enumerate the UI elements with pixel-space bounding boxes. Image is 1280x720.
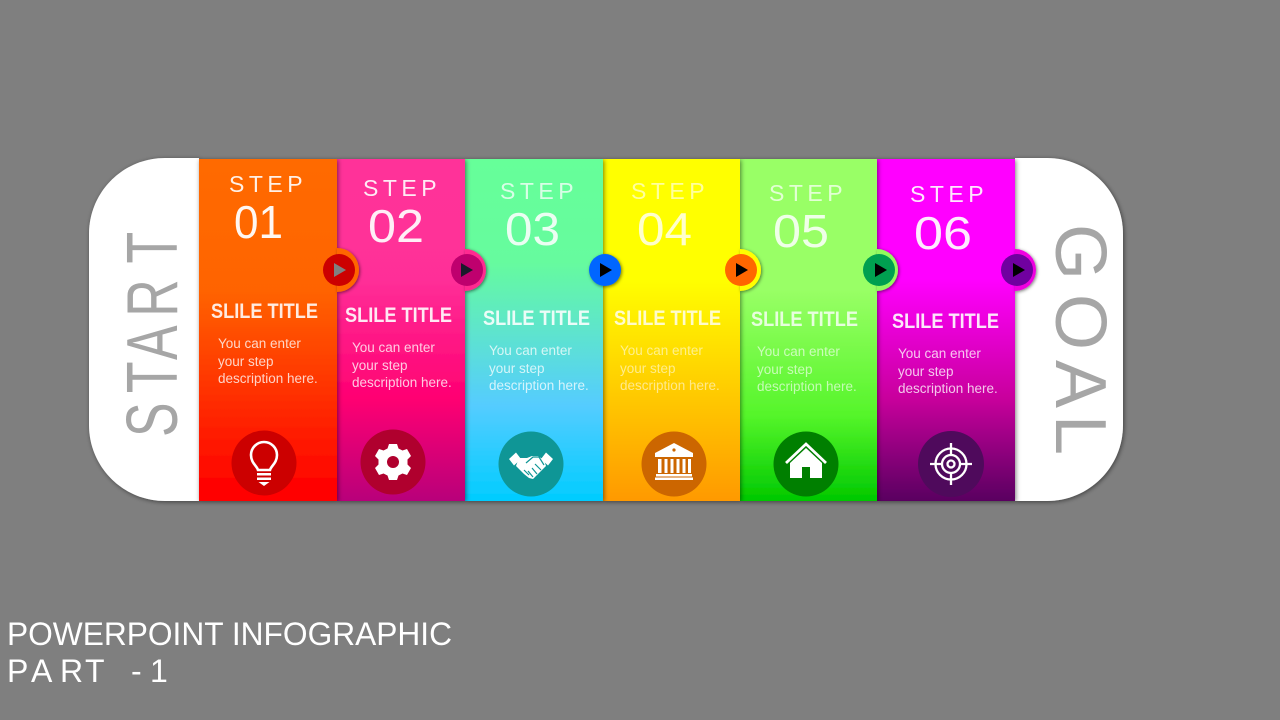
step 01 description: You can enter (218, 336, 301, 351)
step 02 description: your step (352, 358, 408, 373)
step 02 number: 02 (368, 200, 424, 252)
panel: start cap (89, 158, 199, 501)
step 03 description: description here. (489, 378, 589, 393)
step 03 label: STEP (500, 178, 578, 204)
panel: step 05 (740, 159, 877, 501)
label: START: START (113, 232, 193, 437)
connector: step 1 to 2 (323, 248, 359, 292)
panel: goal cap (1015, 158, 1123, 501)
icon: target (918, 431, 984, 497)
step 01 label: STEP (229, 171, 307, 197)
step 05 description: description here. (757, 379, 857, 394)
connector: step 3 to 4 (589, 254, 621, 286)
step 04 description: description here. (620, 378, 720, 393)
panel: step 02 (337, 159, 465, 501)
footer heading: POWERPOINT INFOGRAPHIC (7, 616, 452, 652)
step 05 description: You can enter (757, 344, 840, 359)
step 02 title: SLILE TITLE (345, 304, 452, 327)
connector: step 6 to goal (1001, 249, 1036, 291)
connector: step 2 to 3 (451, 249, 486, 291)
step 04 title: SLILE TITLE (614, 307, 721, 330)
step 02 label: STEP (363, 175, 441, 201)
step 01 number: 01 (234, 196, 283, 248)
icon: house (774, 432, 838, 496)
step 02 description: description here. (352, 375, 452, 390)
panel: step 04 (603, 159, 740, 501)
panel: step 01 (199, 159, 337, 501)
step 03 description: your step (489, 361, 545, 376)
step 06 description: your step (898, 364, 954, 379)
label: GOAL: GOAL (1040, 224, 1120, 455)
step 06 label: STEP (910, 181, 988, 207)
step 06 description: You can enter (898, 346, 981, 361)
connector: step 5 to 6 (863, 249, 898, 291)
step 05 label: STEP (769, 180, 847, 206)
step 01 description: your step (218, 354, 274, 369)
icon: gear (360, 430, 426, 494)
step 06 number: 06 (914, 207, 972, 259)
step 01 title: SLILE TITLE (211, 300, 318, 323)
step 04 number: 04 (637, 203, 692, 255)
step 02 description: You can enter (352, 340, 435, 355)
step 03 number: 03 (505, 203, 560, 255)
connector: step 4 to 5 (725, 249, 761, 291)
step 04 label: STEP (631, 178, 709, 204)
panel: step 03 (465, 159, 603, 501)
footer subheading: PART -1 (7, 653, 168, 689)
icon: light bulb (232, 430, 296, 496)
step 04 description: your step (620, 361, 676, 376)
step 05 title: SLILE TITLE (751, 308, 858, 331)
panel: step 06 (877, 159, 1015, 501)
icon: bank (642, 432, 706, 496)
icon: handshake (498, 432, 564, 496)
step 05 description: your step (757, 362, 813, 377)
step 06 description: description here. (898, 381, 998, 396)
step 05 number: 05 (773, 205, 829, 257)
step 01 description: description here. (218, 371, 318, 386)
step 03 description: You can enter (489, 343, 572, 358)
step 04 description: You can enter (620, 343, 703, 358)
step 03 title: SLILE TITLE (483, 307, 590, 330)
step 06 title: SLILE TITLE (892, 310, 999, 333)
